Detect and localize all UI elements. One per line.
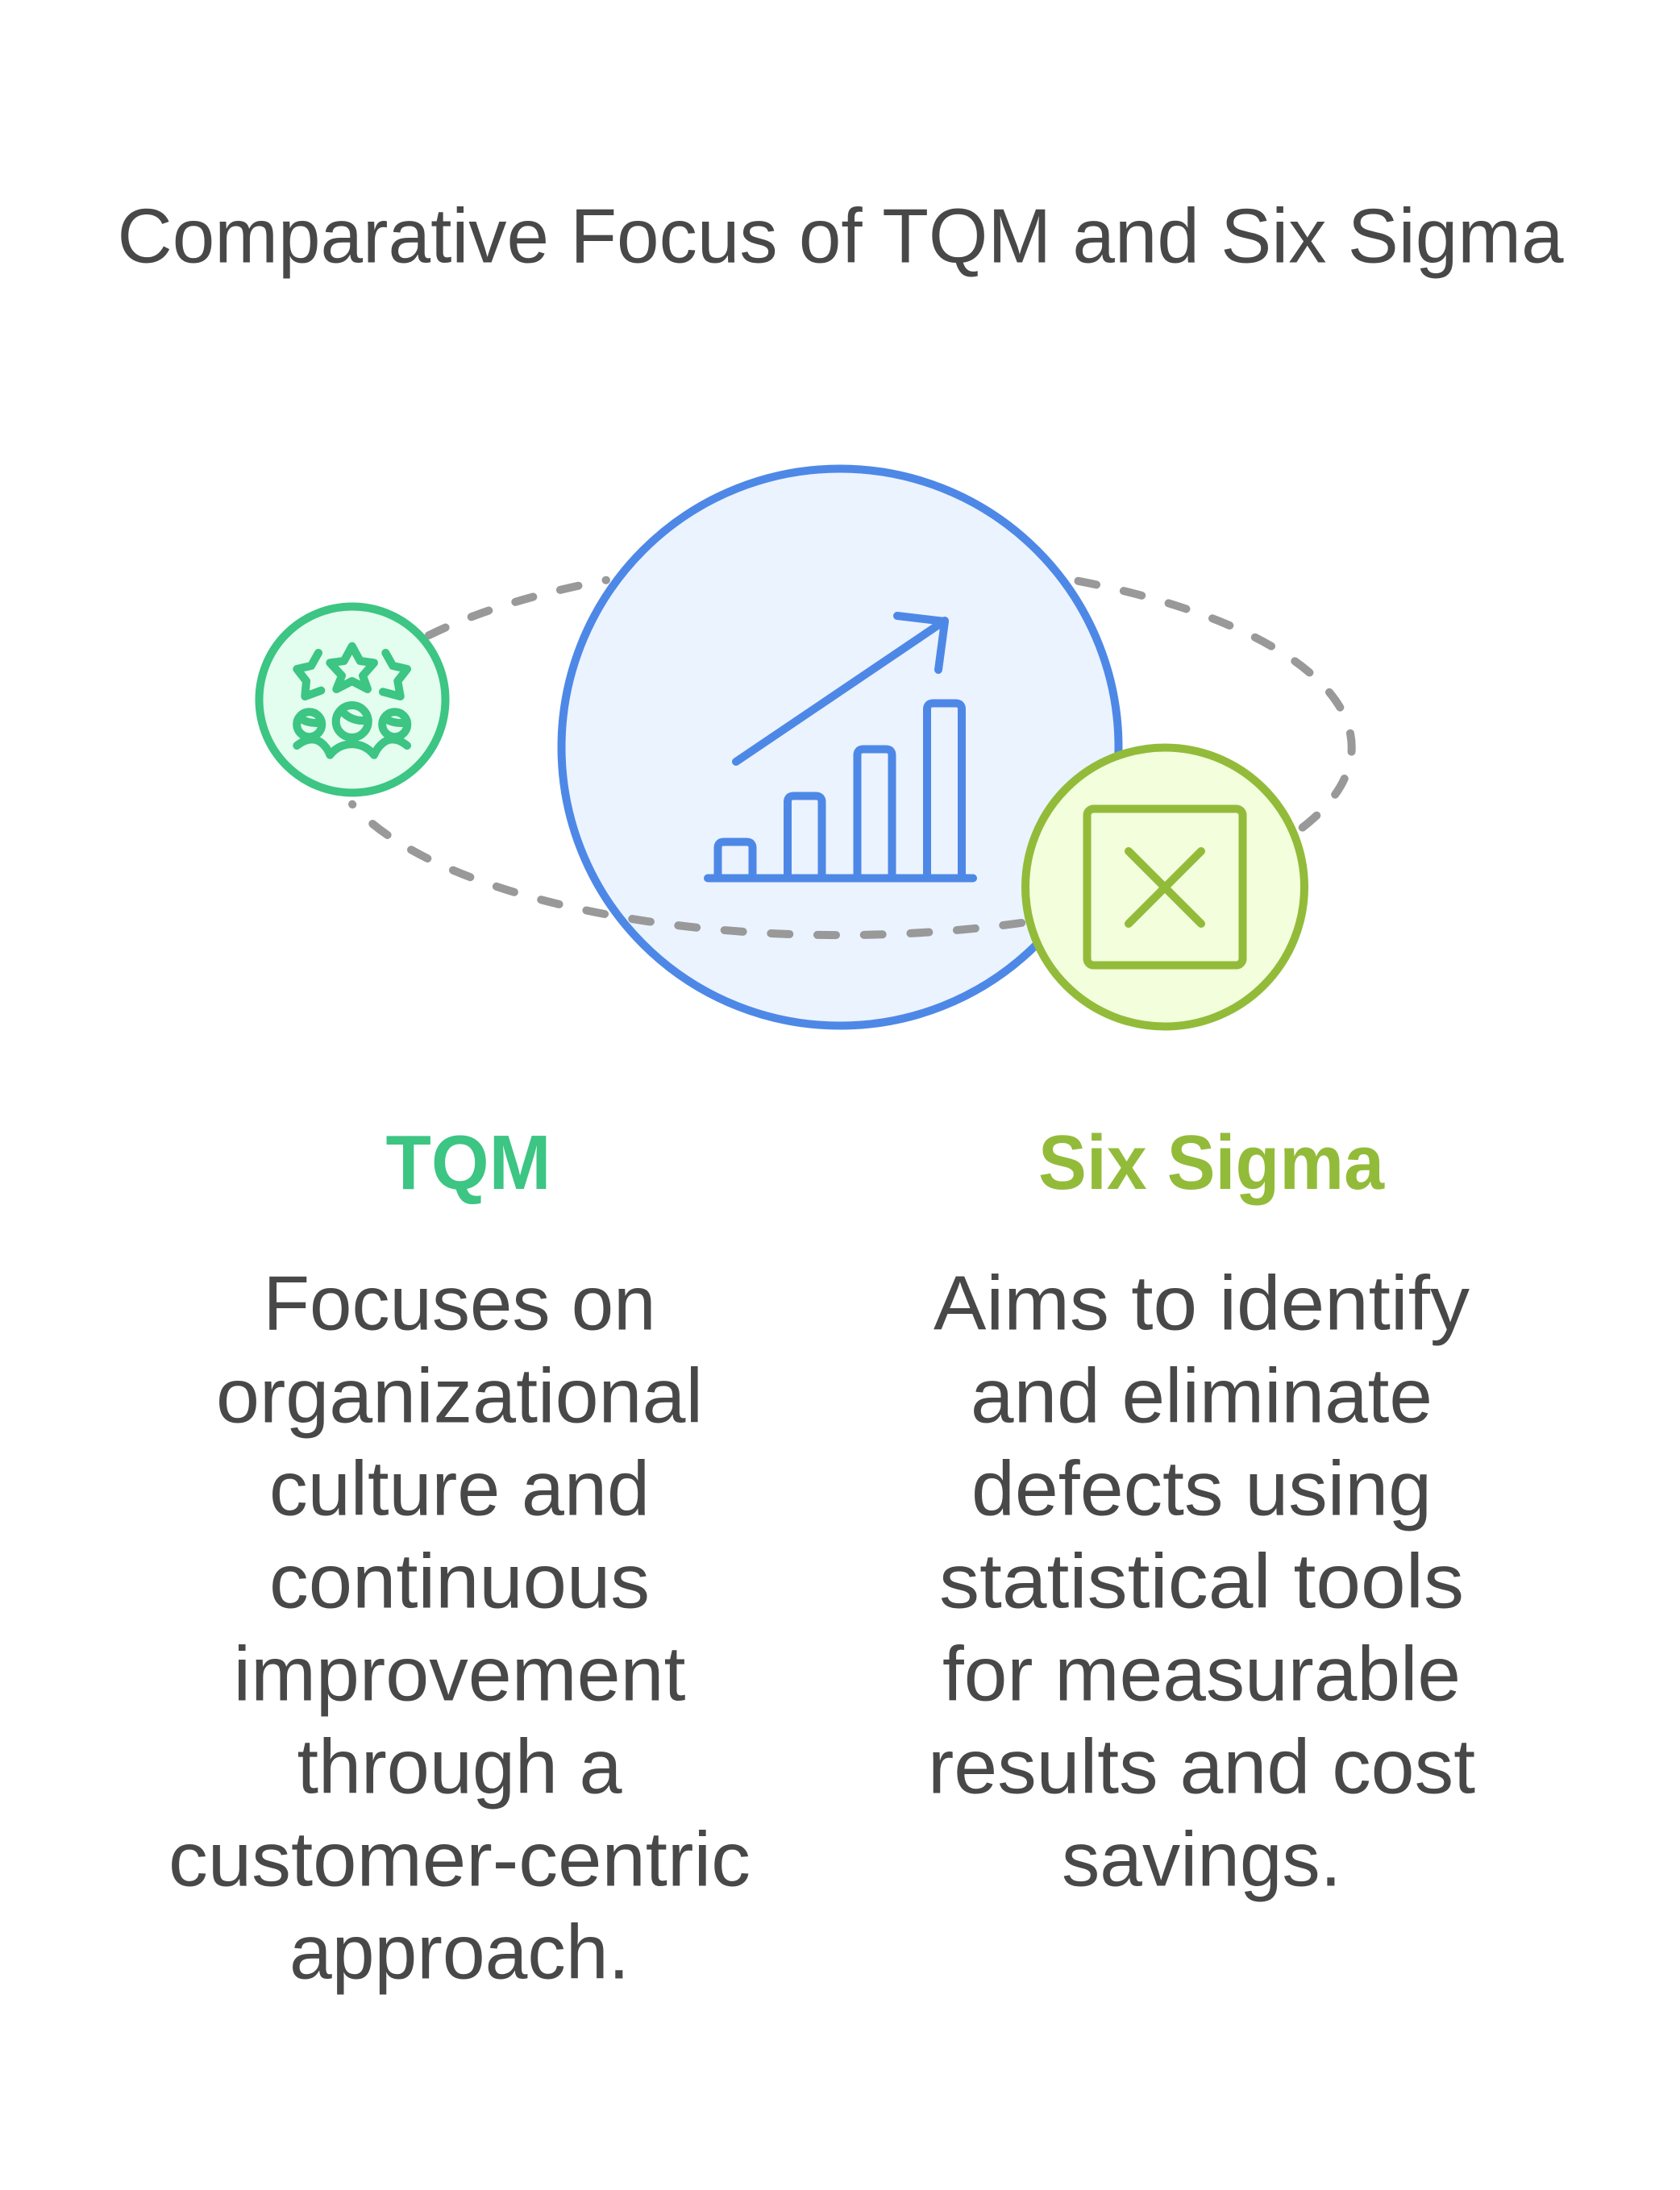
dashed orbit: upper arcs behind main circle [403, 580, 1352, 837]
icon: rising bar chart with arrow [708, 616, 973, 879]
text block: Six Sigma description [928, 1261, 1475, 1902]
text block: TQM description: Focuses on [263, 1261, 656, 1346]
diagram: overlapping circles with dashed orbit [260, 469, 1352, 1027]
text block: TQM description: culture and [269, 1446, 650, 1531]
title: Comparative Focus of TQM and Six Sigma [118, 193, 1564, 279]
arrow [736, 616, 945, 762]
text block: Six Sigma description: Aims to identify [934, 1261, 1470, 1346]
panel: Six Sigma [928, 1120, 1475, 1902]
main circle [561, 469, 1119, 1025]
text block: Six Sigma description: and eliminate [971, 1353, 1433, 1440]
bars [717, 703, 962, 878]
icon: stars above people [297, 646, 407, 755]
text block: TQM description [168, 1261, 751, 1996]
text block: TQM description: continuous [269, 1538, 650, 1625]
text block: TQM description: approach. [289, 1909, 630, 1996]
text block: TQM description: through a [297, 1723, 622, 1810]
icon: square with cross [1087, 809, 1243, 966]
dashed orbit: lower arc over main circle [352, 804, 1048, 935]
text block: Six Sigma description: savings. [1062, 1817, 1341, 1902]
Six Sigma node circle [1025, 748, 1304, 1027]
text block: Six Sigma description: defects using [971, 1446, 1432, 1531]
heading: Six Sigma: Six Sigma [1038, 1120, 1385, 1206]
text block: Six Sigma description: results and cost [928, 1723, 1475, 1810]
panel: TQM [168, 1120, 751, 1996]
text block: Six Sigma description: for measurable [942, 1631, 1461, 1717]
baseline [708, 874, 973, 882]
text block: TQM description: organizational [216, 1353, 703, 1440]
text block: Six Sigma description: statistical tools [939, 1538, 1464, 1625]
text block: TQM description: improvement [234, 1631, 685, 1717]
heading: TQM: TQM [385, 1120, 551, 1206]
TQM node circle [260, 606, 445, 793]
text block: TQM description: customer-centric [168, 1817, 751, 1902]
